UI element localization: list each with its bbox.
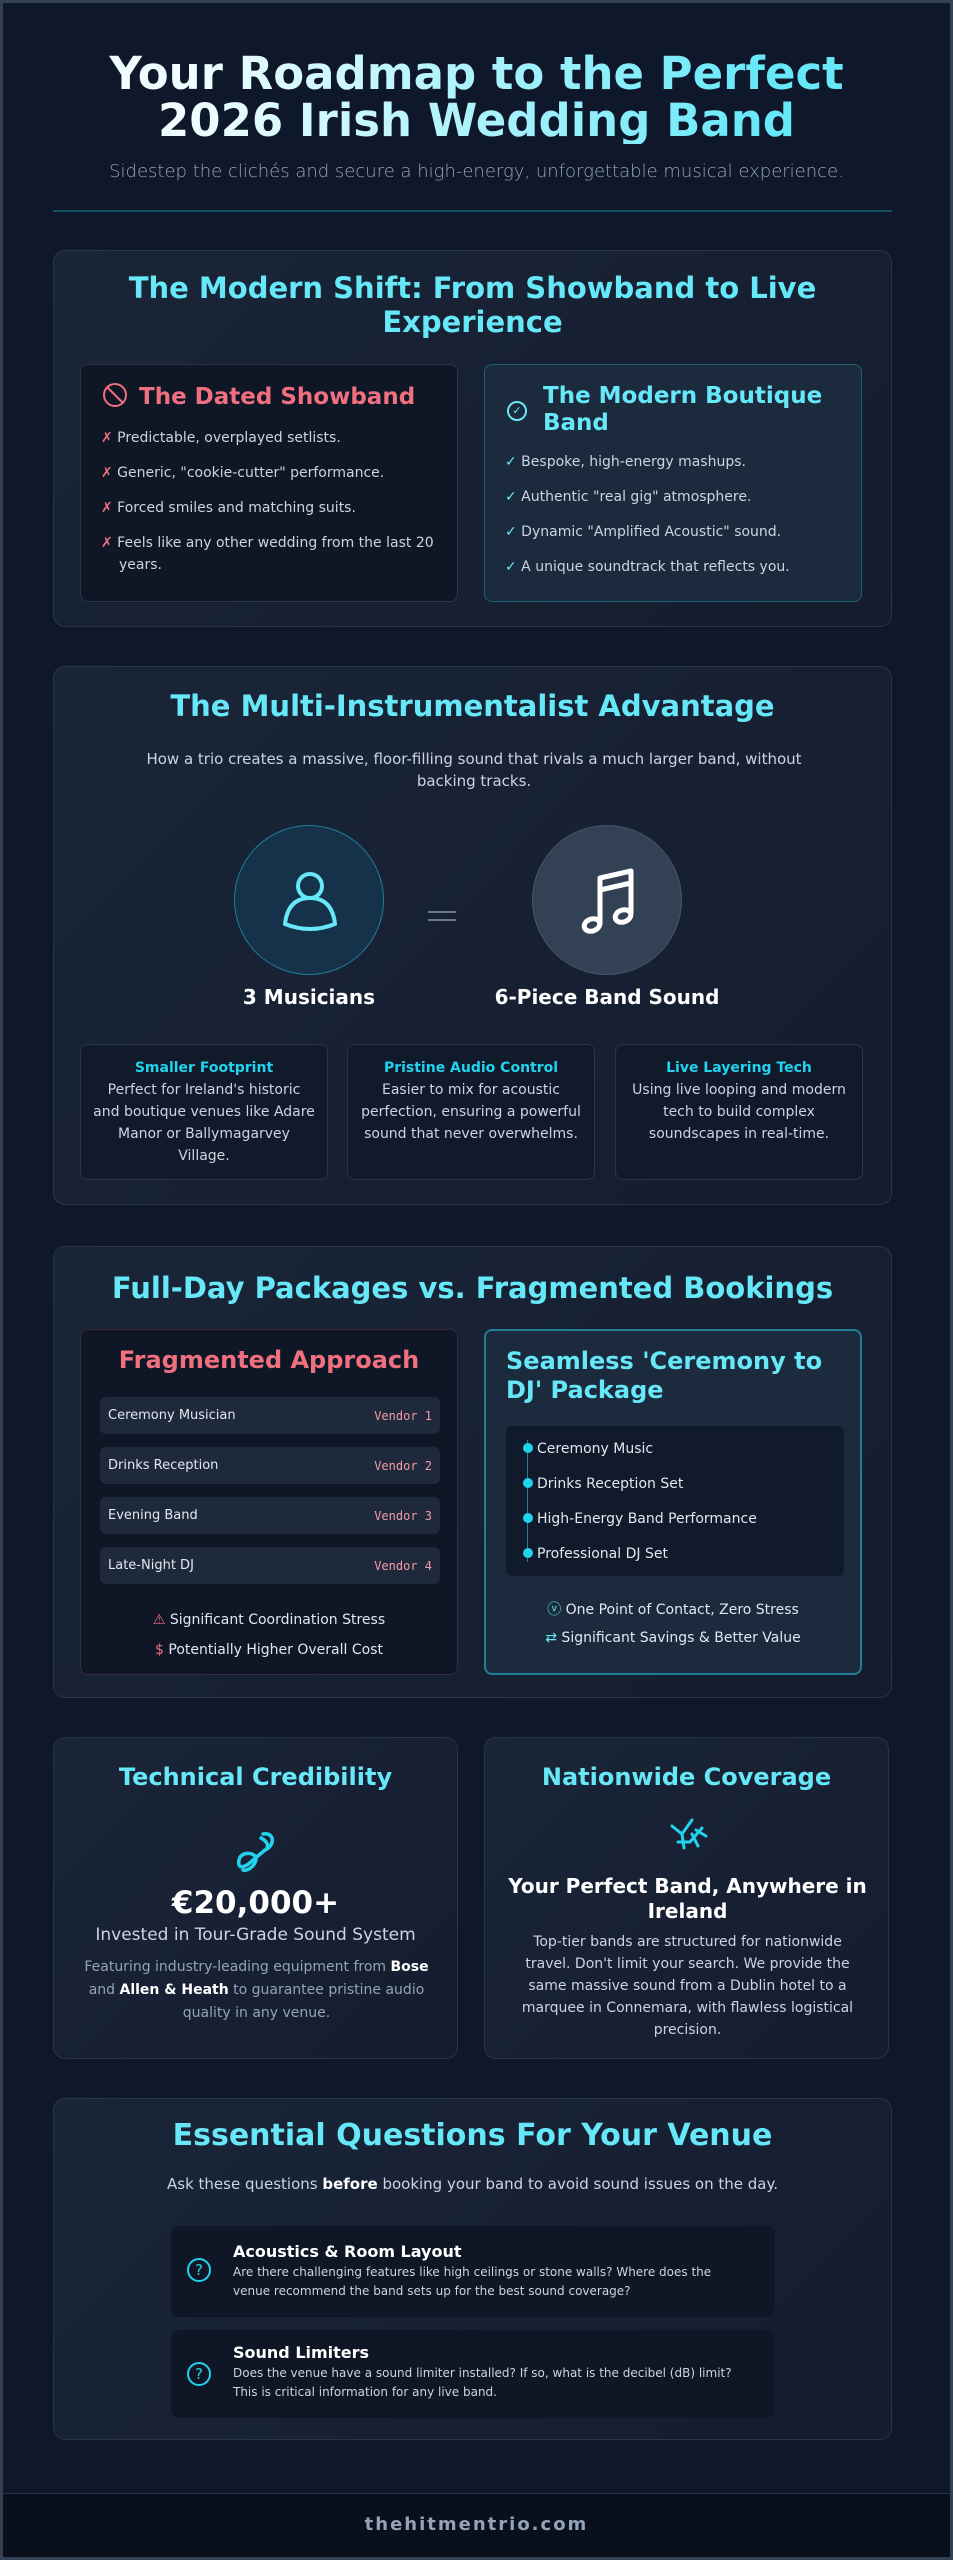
title — [0, 50, 953, 144]
benefits: ⓥ One Point of Contact, Zero Stress — [547, 1602, 799, 1618]
title: 2026 Irish Wedding Band — [158, 94, 795, 147]
heading: modern boutique: The Modern Boutique Band — [543, 383, 822, 436]
heading: Technical Credibility — [119, 1763, 392, 1791]
heading: modern boutique: ✓ — [512, 404, 522, 417]
card: seamless package — [484, 1329, 862, 1675]
question: acoustics: ? — [195, 2261, 203, 2279]
heading: modern shift — [128, 271, 816, 339]
drawbacks: $ Potentially Higher Overall Cost — [155, 1642, 383, 1658]
list: showband cons: ✗ Generic, "cookie-cutter" performance. — [101, 465, 384, 481]
intro: Ask these questions before booking your band to avoid sound issues on the day. — [167, 2175, 778, 2193]
icon: map — [670, 1818, 708, 1850]
question: limiters: Sound Limiters — [233, 2343, 369, 2362]
heading: dated showband: The Dated Showband — [139, 384, 415, 410]
benefits: ⇄ Significant Savings & Better Value — [545, 1630, 801, 1646]
heading: seamless: Seamless 'Ceremony to DJ' Package — [506, 1347, 822, 1404]
card: dated showband — [80, 364, 458, 602]
icon: cable — [236, 1832, 274, 1872]
footer: thehitmentrio.com — [365, 2514, 588, 2535]
vendor rows: Vendor 3 — [374, 1508, 432, 1522]
panel: multi-instrumentalist — [53, 666, 892, 1205]
timeline list: Drinks Reception Set — [537, 1476, 683, 1492]
vendor rows: Ceremony Musician — [108, 1408, 236, 1423]
timeline list: Professional DJ Set — [537, 1546, 668, 1562]
heading: Full-Day Packages vs. Fragmented Bookings — [112, 1271, 833, 1305]
panel: nationwide coverage — [484, 1737, 889, 2059]
label: 3 musicians: 3 Musicians — [243, 985, 375, 1009]
list: showband cons: ✗ Feels like any other wedding from the last 20 years. — [101, 535, 434, 573]
title: Your Roadmap to the Perfect — [109, 47, 844, 100]
panel: modern shift — [53, 250, 892, 627]
timeline list: High-Energy Band Performance — [537, 1511, 757, 1527]
heading: fragmented: Fragmented Approach — [119, 1346, 419, 1374]
card: live layering: Live Layering Tech — [666, 1060, 812, 1076]
list: boutique pros: ✓ A unique soundtrack that reflects you. — [505, 559, 790, 575]
icon: band sound circle — [532, 825, 682, 975]
timeline list: Ceremony Music — [537, 1441, 653, 1457]
list: boutique pros: ✓ Bespoke, high-energy mashups. — [505, 454, 746, 470]
card: live layering — [615, 1044, 863, 1180]
list: showband cons — [101, 430, 434, 573]
stat label: Invested in Tour-Grade Sound System — [95, 1925, 416, 1945]
card: smaller footprint — [80, 1044, 328, 1180]
heading: The Multi-Instrumentalist Advantage — [170, 689, 775, 723]
card: modern boutique — [484, 364, 862, 602]
question: limiters: ? — [195, 2365, 203, 2383]
panel: essential questions — [53, 2098, 892, 2440]
drawbacks: ⚠ Significant Coordination Stress — [153, 1612, 385, 1628]
description: Featuring industry-leading equipment from Bose and Allen & Heath to guarantee pristine audio quality in any venue. — [84, 1959, 429, 2021]
card: pristine audio: Pristine Audio Control — [384, 1060, 558, 1076]
heading: Essential Questions For Your Venue — [173, 2118, 772, 2153]
stat: 20000: €20,000+ — [172, 1885, 339, 1921]
vendor rows: Evening Band — [108, 1508, 198, 1523]
vendor rows — [100, 1397, 440, 1584]
intro text: How a trio creates a massive, floor-filling sound that rivals a much larger band, without backing tracks. — [146, 750, 802, 790]
card: smaller footprint: Smaller Footprint — [135, 1060, 273, 1076]
list: boutique pros: ✓ Authentic "real gig" atmosphere. — [505, 489, 751, 505]
footer — [3, 2493, 950, 2557]
vendor rows: Late-Night DJ — [108, 1558, 194, 1573]
question: acoustics: Acoustics & Room Layout — [233, 2242, 462, 2261]
heading: modern shift: The Modern Shift: From Showband to Live — [129, 271, 816, 305]
subheading: Your Perfect Band, Anywhere in Ireland — [508, 1874, 867, 1923]
vendor rows: Vendor 4 — [374, 1558, 432, 1572]
panel: technical credibility — [53, 1737, 458, 2059]
heading: Nationwide Coverage — [542, 1763, 831, 1791]
card: smaller footprint: Perfect for Ireland's historic and boutique venues like Adare Manor or Ballymagarvey Village. — [93, 1082, 315, 1164]
question: acoustics: Are there challenging features like high ceilings or stone walls? Where does the venue recommend the band sets up for the best sound coverage? — [233, 2265, 711, 2298]
vendor rows: Drinks Reception — [108, 1458, 218, 1473]
benefits — [545, 1602, 801, 1646]
list: boutique pros: ✓ Dynamic "Amplified Acoustic" sound. — [505, 524, 781, 540]
subtitle: Sidestep the clichés and secure a high-energy, unforgettable musical experience. — [109, 161, 844, 182]
card: live layering: Using live looping and modern tech to build complex soundscapes in real-time. — [632, 1082, 846, 1142]
vendor rows: Vendor 2 — [374, 1458, 432, 1472]
question: limiters: Does the venue have a sound limiter installed? If so, what is the decibel (dB) limit? This is critical information for any live band. — [233, 2366, 732, 2399]
heading: modern shift: Experience — [382, 305, 563, 339]
label: 6-piece: 6-Piece Band Sound — [495, 985, 719, 1009]
card: pristine audio — [347, 1044, 595, 1180]
drawbacks — [153, 1612, 385, 1658]
description: Top-tier bands are structured for nationwide travel. Don't limit your search. We provide the same massive sound from a Dublin hotel to a marquee in Connemara, with flawless logistical precision. — [522, 1934, 853, 2038]
timeline list — [506, 1426, 844, 1576]
list: showband cons: ✗ Forced smiles and matching suits. — [101, 500, 356, 516]
question: acoustics — [171, 2226, 775, 2317]
panel: packages — [53, 1246, 892, 1698]
icon: musicians circle — [234, 825, 384, 975]
question: limiters — [171, 2330, 775, 2418]
card: pristine audio: Easier to mix for acoustic perfection, ensuring a powerful sound that never overwhelms. — [361, 1082, 581, 1142]
icon: equals — [428, 911, 456, 921]
vendor rows: Vendor 1 — [374, 1408, 432, 1422]
card: fragmented — [80, 1329, 458, 1675]
list: showband cons: ✗ Predictable, overplayed setlists. — [101, 430, 341, 446]
list: boutique pros — [505, 454, 790, 575]
